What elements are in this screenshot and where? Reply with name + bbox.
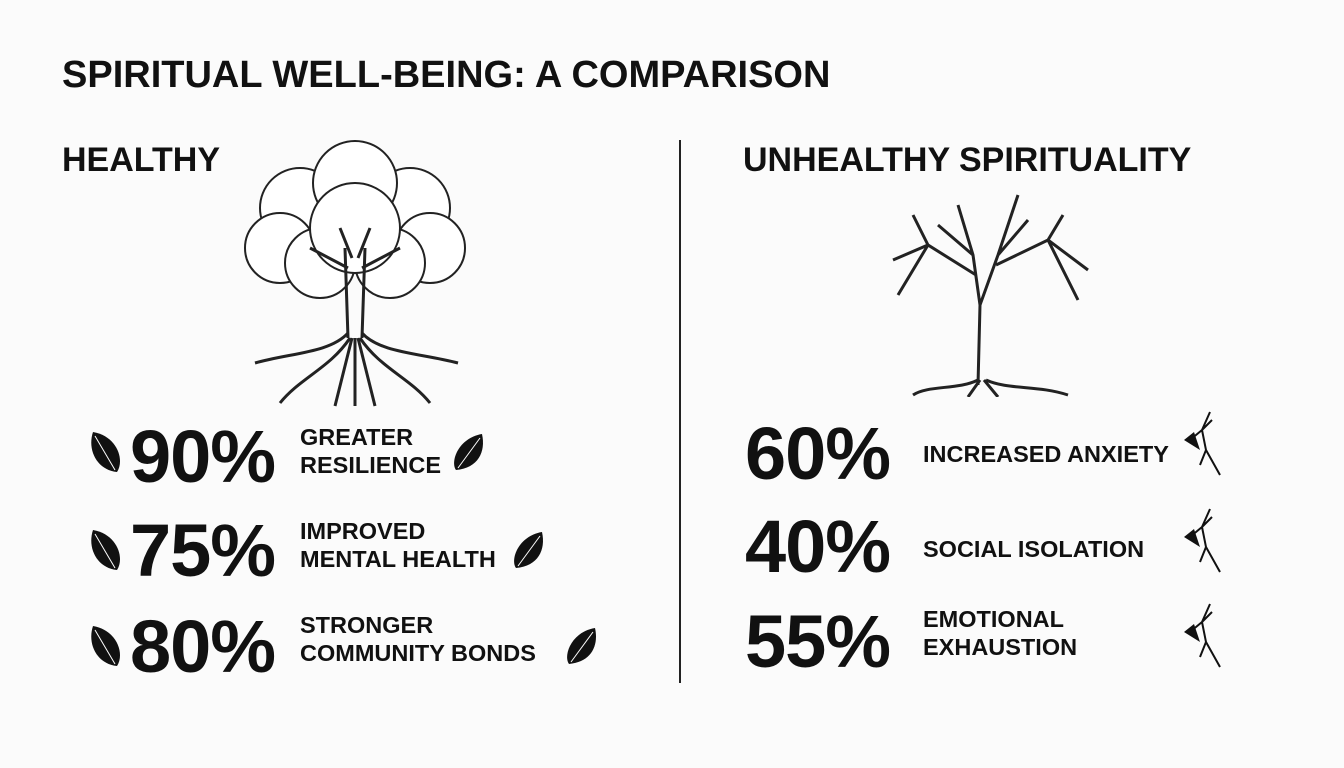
stat: 55% emotional exhaustion: EXHAUSTION [923, 634, 1077, 660]
heading: unhealthy: UNHEALTHY SPIRITUALITY [743, 141, 1191, 179]
stat: 80% stronger community bonds: STRONGER [300, 612, 433, 638]
stat: 90% greater resilience: 90% [130, 415, 275, 498]
stat: 75% improved mental health: 75% [130, 509, 275, 592]
stat: 90% greater resilience: RESILIENCE [300, 452, 441, 478]
icon: healthy tree [244, 140, 466, 406]
stat: 40% social isolation: SOCIAL ISOLATION [923, 536, 1144, 562]
stat: 55% emotional exhaustion: EMOTIONAL [923, 606, 1064, 632]
icon: leaf [454, 434, 483, 470]
stat: 55% emotional exhaustion [745, 600, 1221, 683]
stat: 40% social isolation: 40% [745, 505, 890, 588]
stat: 60% increased anxiety: 60% [745, 412, 890, 495]
divider [679, 140, 681, 683]
heading: healthy: HEALTHY [62, 141, 220, 179]
stat: 80% stronger community bonds: 80% [130, 605, 275, 688]
icon: dead tree [892, 194, 1089, 397]
stat: 90% greater resilience [91, 415, 483, 498]
stat: 80% stronger community bonds [91, 605, 596, 688]
title: SPIRITUAL WELL-BEING: A COMPARISON [62, 54, 830, 96]
stat: 75% improved mental health: IMPROVED [300, 518, 425, 544]
icon: cracked twig [1184, 412, 1221, 476]
icon: leaf [91, 626, 120, 666]
icon: cracked twig [1184, 508, 1221, 572]
icon: leaf [567, 628, 596, 664]
stat: 75% improved mental health: MENTAL HEALTH [300, 546, 496, 572]
icon: cracked twig [1184, 604, 1221, 668]
stat: 60% increased anxiety [745, 412, 1221, 495]
stat: 40% social isolation [745, 505, 1221, 588]
stat: 55% emotional exhaustion: 55% [745, 600, 890, 683]
icon: leaf [91, 530, 120, 570]
stat: 60% increased anxiety: INCREASED ANXIETY [923, 441, 1169, 467]
stat: 90% greater resilience: GREATER [300, 424, 413, 450]
icon: leaf [514, 532, 543, 568]
stat: 80% stronger community bonds: COMMUNITY BONDS [300, 640, 536, 666]
icon: leaf [91, 432, 120, 472]
stat: 75% improved mental health [91, 509, 543, 592]
